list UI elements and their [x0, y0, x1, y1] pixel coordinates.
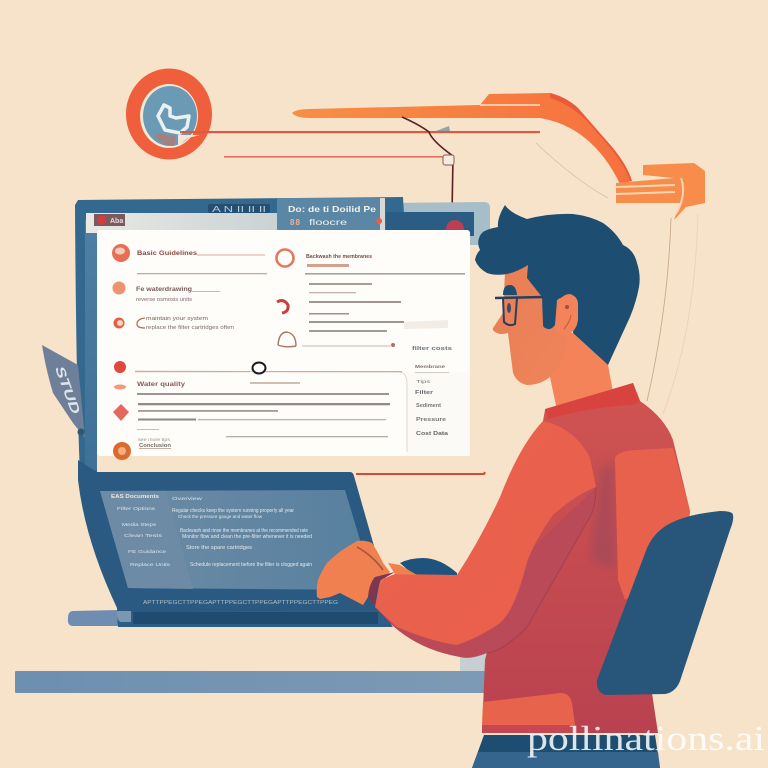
text block: lower section	[135, 371, 402, 449]
collar	[545, 383, 640, 419]
finger	[388, 563, 417, 575]
laptop screen text: Replace Units	[130, 562, 171, 567]
panel: grey window bar	[86, 213, 277, 233]
text block: right column: filter costs	[412, 346, 452, 352]
text block: lower section: Conclusion	[139, 443, 171, 449]
sleeve fold	[375, 487, 596, 658]
ear	[555, 294, 578, 336]
laptop lid	[78, 460, 392, 627]
laptop screen text: Schedule replacement before the filter is clogged again	[190, 562, 312, 568]
panel: monitor frame: floocre	[309, 218, 348, 227]
laptop screen text: Backwash and rinse the membranes at the recommended rate	[180, 528, 308, 534]
laptop shelf	[68, 610, 120, 626]
panel: monitor frame	[75, 197, 474, 475]
laptop screen text: Clean Tests	[124, 533, 163, 538]
text block: side notes: Tips	[416, 379, 431, 384]
back arm	[615, 448, 690, 600]
arrow: orange curved arrow	[292, 93, 705, 220]
panel: person	[317, 205, 690, 768]
back shadow fold	[590, 460, 616, 570]
panel: white document	[97, 230, 470, 456]
text block: left column	[136, 250, 267, 331]
pants	[472, 735, 660, 768]
panel: monitor frame: Do: de ti Doilid Pe	[288, 204, 376, 214]
front arm	[375, 421, 596, 645]
icons: list markers	[112, 244, 395, 460]
text block: side notes: Sediment	[416, 403, 441, 409]
laptop screen text: Overview	[172, 496, 203, 501]
text block: left column: Fe waterdrawing	[136, 287, 192, 293]
laptop screen text: EAS Documents	[111, 494, 159, 500]
watermark: pollinations.ai	[527, 720, 765, 758]
laptop front edge	[117, 610, 393, 627]
text block: left column: replace the filter cartridges often	[146, 325, 234, 331]
eyebrow	[503, 285, 517, 295]
laptop screen text: Regular checks keep the system running properly all year	[172, 508, 294, 514]
panel: monitor frame: A N II II II	[212, 205, 266, 214]
torso	[482, 383, 690, 733]
cuff	[368, 572, 395, 607]
laptop screen text: FE Guidance	[128, 549, 167, 554]
hem	[482, 693, 575, 725]
panel: monitor frame: 8 8	[290, 218, 301, 227]
keyboard row: APTTPPEGCTTPPEGAPTTPPEGCTTPPEGAPTTPPEGCTTPPEG	[143, 600, 338, 606]
text block: right column: Backwash the membranes	[306, 254, 372, 260]
text block: side notes: Membrane	[415, 364, 446, 369]
laptop screen	[100, 490, 372, 590]
chair base	[400, 558, 457, 578]
laptop screen text	[111, 494, 312, 568]
text block: lower section: Water quality	[137, 381, 185, 388]
laptop screen text: Filter Options	[117, 506, 156, 511]
text block: left column: reverse osmosis units	[136, 297, 193, 303]
icon: side pennant	[42, 345, 85, 438]
text block: side notes: Pressure	[416, 417, 446, 423]
laptop screen text: Store the spare cartridges	[186, 545, 253, 551]
text block: right column	[302, 254, 465, 352]
laptop screen text: Media Steps	[122, 522, 157, 527]
connector lines	[180, 117, 698, 414]
neck	[550, 330, 613, 410]
laptop screen text: Monitor flow and clean the pre-filter whenever it is needed	[182, 534, 312, 540]
chair back	[597, 511, 733, 695]
text block: lower section: see more tips	[138, 437, 171, 442]
text block: side notes	[415, 364, 449, 437]
text block: side notes: Cost Data	[416, 431, 449, 437]
laptop screen text: Check the pressure gauge and water flow	[178, 514, 263, 519]
panel: back card	[388, 202, 490, 245]
hand	[317, 541, 390, 605]
text block: left column: maintain your system	[146, 316, 208, 322]
fold line	[487, 487, 596, 653]
face	[493, 262, 567, 385]
panel: grey window bar: Aba	[110, 218, 123, 225]
icon: side pennant: STUD	[52, 364, 84, 417]
grey card behind arm	[460, 650, 490, 671]
text block: left column: Basic Guidelines	[137, 250, 197, 257]
desk	[15, 671, 487, 693]
icon: round badge	[126, 68, 212, 160]
accent line under document	[356, 472, 485, 474]
laptop	[68, 460, 393, 627]
eye	[507, 303, 511, 313]
icon: glasses	[495, 297, 543, 325]
hair	[475, 205, 640, 365]
text block: side notes: Filter	[415, 390, 433, 396]
